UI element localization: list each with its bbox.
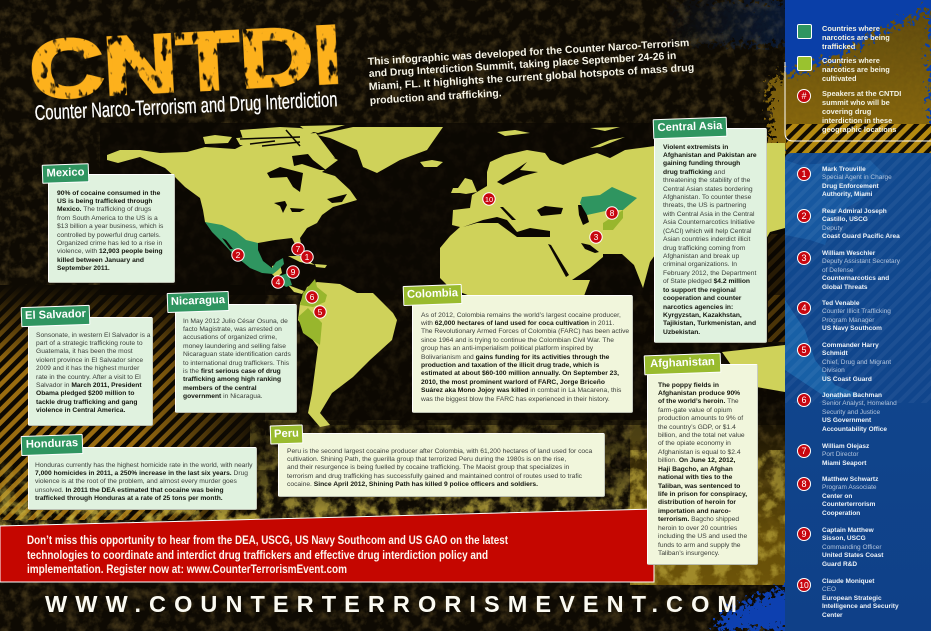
heading: Afghanistan: Afghanistan: [650, 356, 715, 370]
panel: Central Asia: criminal organizations. In: [663, 261, 737, 268]
speaker 6: US Government: [822, 417, 871, 424]
speaker 2: Deputy: [822, 225, 843, 232]
legend: speaker label: Speakers at the CNTDI: [822, 88, 901, 98]
panel: Central Asia: gaining funding through: [663, 160, 740, 167]
map marker 7: 7: [296, 244, 301, 254]
panel: Central Asia: Afghanistan. To counter these: [663, 194, 751, 201]
panel: Colombia: estimated at about $60-100 million annually. On September 23,: [421, 370, 619, 377]
speaker 5: US Coast Guard: [822, 376, 872, 383]
panel: El Salvador: Sonsonate, in western El Salvador is a: [36, 332, 150, 338]
speaker 2: Coast Guard Pacific Area: [822, 233, 900, 240]
legend: cultivated label: cultivated: [822, 74, 856, 83]
speaker 5: Chief, Drug and Migrant: [822, 359, 891, 366]
speaker 3: Deputy Assistant Secretary: [822, 258, 900, 265]
speaker 1: Mark Trouville: [822, 166, 866, 173]
map marker 4: 4: [276, 277, 281, 287]
panel: Central Asia: Afghanistan and Pakistan are: [663, 152, 757, 159]
panel: Central Asia: threats, the US is partnering: [663, 202, 746, 209]
subtitle: Counter Narco-Terrorism and Drug Interdiction: [34, 88, 338, 125]
panel: El Salvador: [28, 317, 153, 426]
panel: Central Asia: with Central Asia in the Central: [663, 211, 754, 218]
panel: Colombia: Bolivarianism and gains funding for its activities through the: [421, 354, 609, 361]
speaker 2: Rear Admiral Joseph: [822, 208, 887, 215]
speaker 10: [797, 578, 899, 619]
speaker 2: [797, 208, 900, 240]
panel: Peru: Peru is the second largest cocaine producer after Colombia, with 61,200 hectares of land used for coca: [287, 448, 592, 454]
speaker 3: Counternarcotics and: [822, 275, 889, 282]
panel: Afghanistan: Taliban, was sentenced to: [658, 483, 740, 490]
panel: Central Asia: of State pledged $4.2 million: [663, 278, 750, 285]
legend: speaker label: geographic locations: [822, 124, 896, 134]
speaker 4: [797, 300, 891, 332]
legend: speaker label: covering drug: [822, 106, 871, 116]
panel: Honduras: violence is at the root of the problem, and almost every murder goes: [35, 478, 237, 485]
speaker 9: United States Coast: [822, 552, 883, 559]
map marker 1: [301, 251, 313, 263]
map marker 6: 6: [310, 292, 315, 302]
panel: Central Asia: [654, 128, 767, 343]
panel: El Salvador: tackle drug trafficking and gang: [36, 399, 137, 406]
panel: Afghanistan: farm-gate value of opium: [658, 407, 732, 414]
map: cultivating countries: [298, 210, 623, 345]
panel: Central Asia: Central Asian states bordering: [663, 186, 753, 193]
panel: Afghanistan: Haji Bagcho, an Afghan: [658, 466, 733, 473]
panel: Central Asia: cooperation and counter: [663, 295, 741, 302]
panel: Colombia: was the biggest blow the FARC has experienced in their history.: [421, 396, 610, 403]
panel: Afghanistan: national with ties to the: [658, 474, 732, 481]
heading: Mexico: Mexico: [46, 166, 85, 180]
panel: Afghanistan: Afghanistan is equal to $2.4: [658, 449, 741, 456]
speaker 1: 1: [801, 169, 806, 179]
speaker 9: Commanding Officer: [822, 544, 882, 551]
speaker 3: [797, 250, 900, 291]
panel: El Salvador: 2009 and it has the highest murder: [36, 365, 139, 372]
speaker 7: 7: [801, 446, 806, 456]
speaker 9: Guard R&D: [822, 561, 857, 568]
map marker 1: 1: [305, 252, 310, 262]
speaker 7: Port Director: [822, 451, 858, 458]
panel: Afghanistan: Afghanistan produce 90%: [658, 390, 740, 397]
panel: Mexico: from South America to the US is a: [57, 215, 158, 222]
legend: speaker label: summit who will be: [822, 98, 890, 106]
heading: Nicaragua: Nicaragua: [171, 294, 225, 308]
heading: Peru: [270, 424, 303, 445]
speaker 10: CEO: [822, 586, 836, 593]
map: land masses: [107, 125, 785, 427]
panel: Honduras: trafficked through Honduras at a rate of 25 tons per month.: [35, 495, 223, 502]
panel: Central Asia: Uzbekistan.: [663, 329, 700, 336]
legend: trafficked label: Countries where: [822, 24, 880, 33]
speaker 10: European Strategic: [822, 595, 882, 602]
map marker 9: [287, 266, 299, 278]
panel: Mexico: 90% of cocaine consumed in the: [57, 190, 160, 196]
speaker 1: Authority, Miami: [822, 191, 872, 198]
map marker 9: 9: [291, 267, 296, 277]
map marker 2: 2: [236, 250, 241, 260]
legend: speaker label: interdiction in these: [822, 116, 892, 124]
speaker 9: Sisson, USCG: [822, 535, 866, 542]
legend: trafficked label: [822, 24, 890, 51]
panel: Nicaragua: money laundering and selling false: [183, 343, 286, 350]
speaker 6: Jonathan Bachman: [822, 392, 882, 399]
panel: El Salvador: Obama pledged $200 million to: [36, 390, 134, 397]
panel: Central Asia: Kyrgyzstan, Kazakhstan,: [663, 312, 742, 319]
panel: Central Asia: Violent extremists in: [663, 144, 728, 150]
panel: Central Asia: Asia Counternarcotics Initiative: [663, 219, 755, 226]
panel: Central Asia: Asian countries inderdict illicit: [663, 236, 750, 243]
map marker 3: 3: [594, 232, 599, 242]
intro text: production and trafficking.: [370, 88, 502, 107]
panel: Central Asia: narcotics agencies in:: [663, 304, 733, 311]
panel: Central Asia: Afghanistan and break up: [663, 253, 739, 260]
panel: Central Asia: Tajikistan, Turkmenistan, and: [663, 320, 756, 327]
panel: Mexico: controlled by powerful drug cartels.: [57, 232, 161, 239]
speaker 2: Castillo, USCG: [822, 216, 868, 223]
legend: cultivated label: narcotics are being: [822, 65, 890, 74]
panel: Central Asia: drug trafficking and: [663, 169, 725, 176]
speaker 10: 10: [799, 580, 809, 590]
speaker 4: Program Manager: [822, 317, 874, 324]
panel: Nicaragua: is the first serious case of drug: [183, 368, 281, 375]
legend: trafficked label: trafficked: [822, 42, 855, 51]
intro text: This infographic was developed for the Counter Narco-Terrorism: [368, 38, 690, 68]
panel: Peru: and their resurgence is being fuelled by cocaine trafficking. The Maoist group that specializes in: [287, 464, 569, 471]
speaker 5: [797, 342, 891, 383]
panel: Peru: [278, 433, 605, 497]
speaker 5: Commander Harry: [822, 342, 879, 349]
map marker 10: [483, 193, 495, 205]
panel: Afghanistan: billion. On June 12, 2012,: [658, 457, 735, 464]
panel: El Salvador: violent province in El Salvador since: [36, 357, 143, 364]
panel: Afghanistan: of the world’s heroin. The: [658, 398, 739, 405]
panel: Nicaragua: government in Nicaragua.: [183, 393, 263, 400]
panel: Nicaragua: [175, 304, 297, 413]
speaker 3: 3: [801, 253, 806, 263]
panel: Nicaragua: accusations of organized crime,: [183, 334, 277, 341]
speaker 5: Division: [822, 367, 845, 374]
panel: El Salvador: violence in Central America.: [36, 407, 125, 414]
heading: Central Asia: [653, 117, 727, 139]
panel: Afghanistan: billion, and the total net value: [658, 432, 745, 439]
panel: Afghanistan: Taliban’s insurgency.: [658, 550, 719, 557]
panel: Afghanistan: [647, 364, 758, 565]
speaker 5: Schmidt: [822, 350, 848, 357]
legend: speaker marker: [797, 89, 811, 103]
panel: Mexico: violence, with 12,903 people being: [57, 248, 163, 255]
banner text: [27, 533, 508, 576]
panel: Colombia: [412, 295, 633, 413]
panel: Mexico: $13 billion a year business, which is: [57, 223, 163, 230]
map marker 3: [590, 231, 602, 243]
speaker 4: US Navy Southcom: [822, 325, 882, 332]
legend: cultivated swatch: [797, 56, 812, 71]
panel: Nicaragua: trafficking among high ranking: [183, 376, 281, 383]
panel: Mexico: September 2011.: [57, 265, 110, 272]
red banner background: [0, 509, 654, 582]
panel: Nicaragua: Nicaraguan state identification cards: [183, 351, 291, 358]
panel: Afghanistan: life in prison for conspiracy,: [658, 491, 747, 498]
speaker 5: 5: [801, 345, 806, 355]
speaker 4: 4: [801, 303, 806, 313]
map marker 10: 10: [485, 195, 493, 204]
panel: Mexico: US is being trafficked through: [57, 198, 152, 205]
panel: Afghanistan: heroin to over 20 countries: [658, 525, 737, 532]
panel: El Salvador: rate in the country. After a visit to El: [36, 374, 141, 381]
legend: speaker label: [822, 88, 901, 134]
speaker 6: Senior Analyst, Homeland: [822, 400, 897, 407]
panel: Central Asia: (CACI) which will help Central: [663, 228, 751, 235]
speaker 10: Center: [822, 612, 843, 619]
panel: Afghanistan: production amounts to 9% of: [658, 415, 743, 422]
panel: Colombia: The Revolutionary Armed Forces of Colombia (FARC) has been active: [421, 328, 629, 335]
map marker 7: [292, 243, 304, 255]
speaker 6: [797, 392, 897, 433]
heading: Honduras: Honduras: [26, 437, 78, 451]
speakers panel background: [785, 153, 931, 631]
intro text: [368, 38, 695, 107]
speaker 8: [797, 476, 878, 517]
panel: Nicaragua: In May 2012 Julio César Osuna, de: [183, 318, 288, 324]
speaker 6: 6: [801, 395, 806, 405]
legend: trafficked label: narcotics are being: [822, 33, 890, 42]
panel: Central Asia: threatening the stability of the: [663, 177, 750, 184]
panel: Afghanistan: terrorism. Bagcho shipped: [658, 516, 739, 523]
speaker 1: [797, 166, 892, 198]
map marker 2: [232, 249, 244, 261]
panel: Honduras: unsolved. In 2011 the DEA estimated that cocaine was being: [35, 487, 224, 494]
panel: Peru: cultivation. Shining Path, the guerilla group that terrorized Peru during the 1980s is on the rise,: [287, 456, 566, 463]
panel: Nicaragua: members of the central: [183, 385, 257, 392]
speaker 7: Miami Seaport: [822, 460, 866, 467]
speaker 4: Ted Venable: [822, 300, 859, 307]
panel: Mexico: Organized crime has led to a rise in: [57, 240, 162, 247]
speaker 4: Counter Illicit Trafficking: [822, 308, 891, 315]
panel: Afghanistan: the country’s GDP, or $1.4: [658, 424, 736, 431]
speaker 9: [797, 527, 884, 568]
website url: WWW.COUNTERTERRORISMEVENT.COM: [45, 591, 737, 617]
panel: El Salvador: Salvador in March 2011, President: [36, 382, 142, 389]
speaker 8: Cooperation: [822, 510, 860, 517]
panel: Nicaragua: facto Magistrate, was arrested on: [183, 326, 282, 333]
panel: Central Asia: February 2012, the Department: [663, 270, 756, 277]
heading: Nicaragua: [167, 291, 229, 313]
intro text: Miami, FL. It highlights the current global hotspots of mass drug: [369, 63, 695, 93]
panel: Mexico: Mexico. The trafficking of drugs: [57, 206, 151, 213]
legend: trafficked swatch: [797, 24, 812, 39]
speaker markers on map: [232, 193, 618, 318]
panel: Afghanistan: importation and narco-: [658, 508, 731, 515]
speaker 2: 2: [801, 211, 806, 221]
speaker 1: Drug Enforcement: [822, 183, 879, 190]
heading: Mexico: [42, 163, 89, 184]
legend: speaker marker: #: [801, 91, 806, 101]
map marker 5: [314, 306, 326, 318]
world map: [107, 125, 785, 427]
speaker 6: Accountability Office: [822, 426, 887, 433]
map marker 8: 8: [610, 208, 615, 218]
panel: Colombia: group has an anti-imperialism political platform inspired by: [421, 345, 593, 352]
banner text: implementation. Register now at: www.CounterTerrorismEvent.com: [27, 562, 347, 576]
speaker 7: William Olejasz: [822, 443, 869, 450]
panel: El Salvador: Guatemala, it has been the most: [36, 348, 133, 355]
map marker 8: [606, 207, 618, 219]
map marker 6: [306, 291, 318, 303]
panel: Colombia: Suárez aka Mono Jojoy was killed in combat in La Macarena, this: [421, 387, 621, 394]
heading: Colombia: Colombia: [407, 287, 458, 301]
speaker 1: Special Agent in Charge: [822, 174, 892, 181]
panel: Afghanistan: funds to arm and supply the: [658, 542, 741, 549]
map marker 4: [272, 276, 284, 288]
panel: Colombia: since 1964 and is trying to continue the Colombian Civil War. The: [421, 337, 614, 344]
panel: El Salvador: part of a strategic trafficking route to: [36, 340, 143, 347]
legend: cultivated label: [822, 56, 890, 83]
panel: Central Asia: to support the regional: [663, 287, 736, 294]
speaker 3: William Weschler: [822, 250, 875, 257]
speaker 10: Intelligence and Security: [822, 603, 899, 610]
speaker 9: Captain Matthew: [822, 527, 874, 534]
speaker 8: Center on: [822, 493, 852, 500]
panel: Honduras: 7,000 homicides in 2011, a 250% increase in the last six years. Drug: [35, 470, 248, 477]
heading: Honduras: [21, 434, 83, 456]
panel: Afghanistan: of the opiate economy in: [658, 440, 731, 447]
heading: Peru: Peru: [274, 428, 299, 440]
panel: Colombia: production and taxation of the illicit drug trade, which is: [421, 362, 599, 369]
banner text: technologies to coordinate and interdict drug traffickers and effective drug interdiction policy and: [27, 548, 488, 562]
intro text: and Drug Interdiction Summit, taking place September 24-26 in: [369, 51, 677, 80]
map marker 5: 5: [318, 307, 323, 317]
heading: Colombia: [403, 284, 462, 306]
logo CNTDI: CNTDI: [27, 9, 344, 116]
panel: Peru: cocaine. Since April 2012, Shining Path has killed 9 police officers and soldiers.: [287, 481, 538, 488]
panel: Afghanistan: The poppy fields in: [658, 382, 719, 388]
speaker 8: Counterterrorism: [822, 501, 875, 508]
speaker 8: Program Associate: [822, 484, 877, 491]
panel: Honduras: [28, 447, 257, 510]
panel: Colombia: As of 2012, Colombia remains the world’s largest cocaine producer,: [421, 312, 621, 318]
panel: Mexico: [48, 174, 175, 283]
speaker 8: Matthew Schwartz: [822, 476, 878, 483]
panel: Colombia: 2010, the most prominent warlord of FARC, Jorge Briceño: [421, 379, 605, 386]
top right blue and gold corner: [660, 0, 931, 154]
heading: El Salvador: El Salvador: [25, 308, 86, 322]
bottom right blue speckle: [715, 585, 800, 631]
panel: Colombia: with 62,000 hectares of land used for coca cultivation in 2011.: [421, 320, 614, 327]
map: trafficking countries: [205, 187, 637, 287]
speaker 3: Global Threats: [822, 284, 868, 291]
speaker 10: Claude Moniquet: [822, 578, 874, 585]
speaker 9: 9: [801, 529, 806, 539]
panel: Central Asia: drug trafficking coming from: [663, 245, 745, 252]
panel: Afghanistan: distribution of heroin for: [658, 499, 736, 506]
speaker 3: of Defense: [822, 267, 853, 274]
map: seas cut into land: [240, 130, 599, 277]
panel: Peru: terrorism and drug trafficking has successfully gained and maintained control of routes used to trafic: [287, 473, 582, 480]
panel: Afghanistan: including the US and used the: [658, 533, 747, 540]
panel: Honduras: Honduras currently has the highest homicide rate in the world, with nearly: [35, 462, 252, 468]
heading: Central Asia: Central Asia: [657, 120, 723, 134]
heading: El Salvador: [21, 305, 90, 327]
heading: Afghanistan: [644, 353, 721, 375]
speaker 6: Security and Justice: [822, 409, 880, 416]
speaker 8: 8: [801, 479, 806, 489]
legend: cultivated label: Countries where: [822, 56, 880, 65]
panel: Nicaragua: to international drug traffickers. This: [183, 360, 289, 367]
banner text: Don’t miss this opportunity to hear from the DEA, USCG, US Navy Southcom and US GAO on the latest: [27, 533, 508, 547]
speaker 7: [797, 443, 870, 467]
panel: Mexico: killed between January and: [57, 257, 144, 264]
